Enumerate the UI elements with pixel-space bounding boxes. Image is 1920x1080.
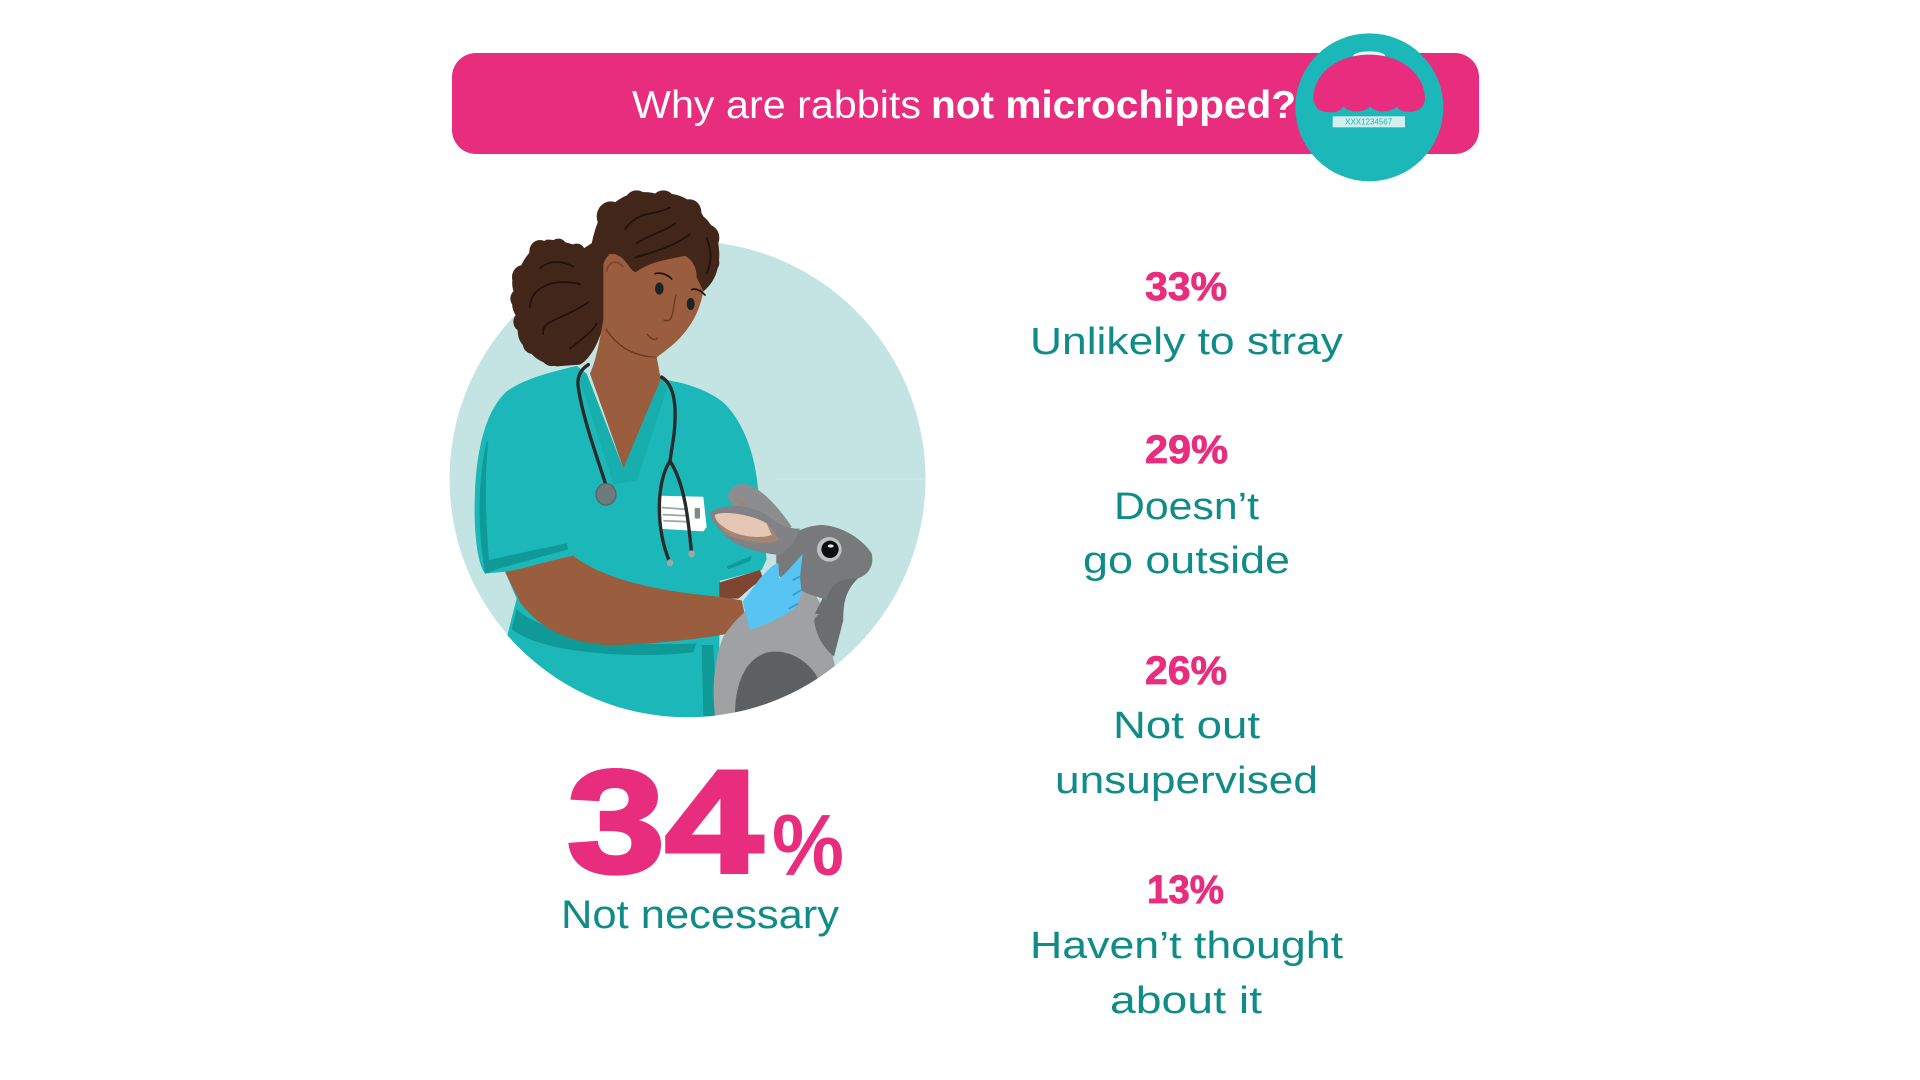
stat: 29% doesn't go outside: [1083, 428, 1290, 582]
main statistic: 34% not necessary: [561, 740, 844, 937]
illustration: vet holding a rabbit: [450, 190, 926, 727]
stat: 13% haven't thought about it: Haven’t thought: [1030, 925, 1344, 967]
stat: 33% unlikely to stray: 33%: [1145, 265, 1227, 309]
vet figure: [475, 190, 767, 727]
stat: 33% unlikely to stray: Unlikely to stray: [1030, 321, 1343, 363]
stat: 13% haven't thought about it: 13%: [1147, 868, 1224, 912]
stat: 29% doesn't go outside: 29%: [1145, 428, 1228, 472]
stat: 29% doesn't go outside: Doesn’t: [1114, 486, 1259, 528]
stat: 26% not out unsupervised: 26%: [1145, 649, 1227, 693]
icon: microchip badge: XXX1234567: [1345, 118, 1393, 127]
title text: not microchipped?: [931, 84, 1296, 127]
title banner: [452, 53, 1479, 154]
skin: face and neck: [590, 238, 703, 468]
far arm: [719, 570, 763, 599]
icon: microchip badge: [1295, 33, 1443, 181]
scrubs: [475, 366, 767, 727]
title text: Why are rabbits: [632, 84, 921, 127]
stat: 29% doesn't go outside: go outside: [1083, 540, 1290, 582]
main statistic: 34% not necessary: 34: [567, 740, 763, 903]
V-neck skin: [590, 357, 660, 412]
background circle: [450, 241, 926, 717]
face details: [647, 273, 705, 339]
hair bun: [510, 238, 609, 366]
name badge: [660, 496, 707, 531]
stat: 13% haven't thought about it: [1030, 868, 1344, 1022]
main statistic: 34% not necessary: %: [772, 798, 844, 894]
hair top: [590, 190, 719, 291]
title text: [632, 84, 1296, 127]
main statistic: 34% not necessary: Not necessary: [561, 893, 839, 937]
infographic canvas: [450, 33, 1479, 1014]
stat: 13% haven't thought about it: about it: [1110, 980, 1263, 1022]
near arm: [505, 556, 748, 645]
stat: 26% not out unsupervised: unsupervised: [1055, 760, 1318, 802]
stethoscope: [578, 365, 693, 565]
blue glove: [743, 554, 803, 630]
rabbit: [710, 484, 872, 727]
stat: 26% not out unsupervised: Not out: [1113, 705, 1261, 747]
stat: 26% not out unsupervised: [1055, 649, 1318, 802]
stat: 33% unlikely to stray: [1030, 265, 1343, 363]
